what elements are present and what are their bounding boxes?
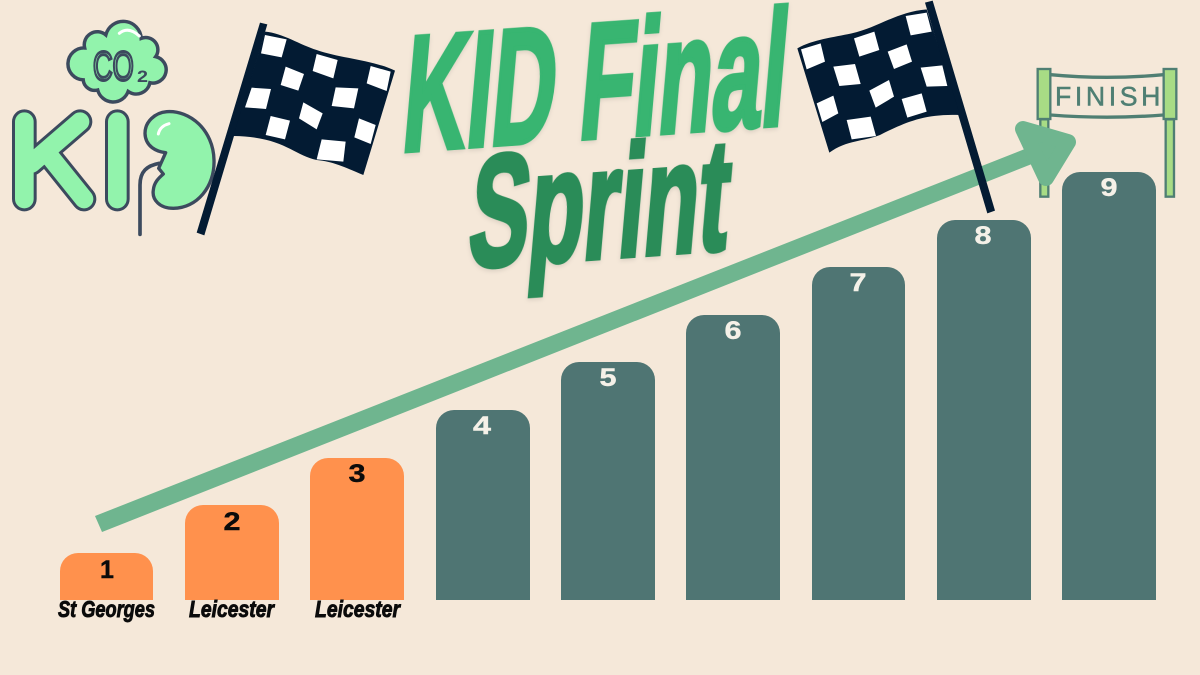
label: St Georges: St Georges: [58, 596, 155, 622]
bar 2: Leicester: 2: [224, 508, 240, 536]
icon: finish gate: [1038, 69, 1176, 197]
logo cloud: CO: [93, 43, 134, 89]
logo letter K: [24, 122, 84, 199]
bar 8: 8: [974, 222, 992, 250]
bar 6: 6: [724, 317, 742, 345]
bar 5: 5: [600, 364, 617, 392]
logo cloud: [68, 21, 166, 102]
logo letter I: [80, 122, 154, 199]
bar 8: [937, 220, 1031, 600]
bar 3: Leicester: [310, 458, 404, 600]
label: Leicester: Leicester: [315, 596, 401, 622]
bar 4: 4: [473, 412, 491, 440]
finish gate banner: [1051, 75, 1163, 117]
title line 2: Sprint: [463, 105, 738, 301]
logo kidney: [140, 112, 214, 234]
bar 7: [812, 267, 905, 600]
bar 1: St Georges: [60, 553, 153, 600]
arrow: rising progress: [95, 129, 1068, 532]
icon: right chequered flag: [797, 1, 995, 213]
bar 1: St Georges: 1: [100, 556, 114, 584]
bar 7: 7: [850, 269, 866, 297]
bar 9: [1062, 172, 1156, 600]
label: Leicester: Leicester: [189, 596, 275, 622]
bar 5: [561, 362, 655, 600]
icon: left chequered flag: [197, 23, 395, 235]
finish gate posts: [1038, 69, 1176, 197]
bar 2: Leicester: [185, 505, 279, 600]
finish gate text: FINISH: [1055, 82, 1160, 112]
bar 9: 9: [1100, 174, 1118, 202]
logo cloud: 2: [137, 67, 148, 86]
bar 3: Leicester: 3: [348, 460, 366, 488]
logo: KID with CO2 cloud and kidney: [24, 21, 214, 234]
bar 6: [686, 315, 780, 600]
bar 4: [436, 410, 530, 600]
